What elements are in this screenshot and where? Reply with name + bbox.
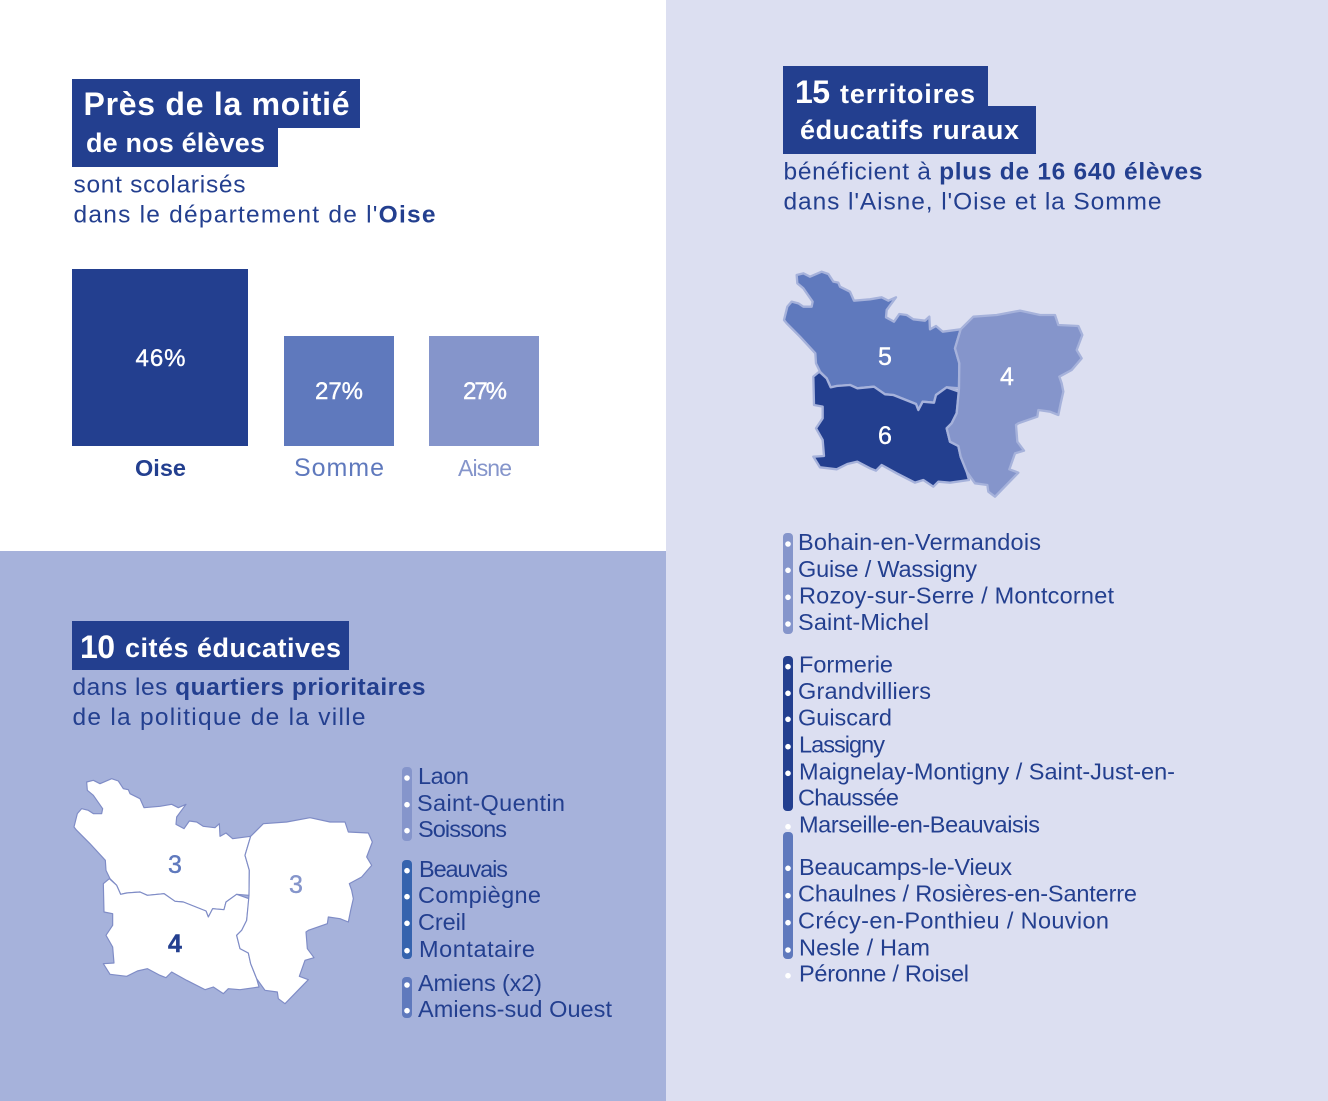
list: Aisne territories (783, 529, 1114, 635)
list: Aisne cities: Saint-Quentin (417, 790, 565, 816)
list: Aisne cities: Laon (418, 763, 469, 789)
text: quartiers prioritaires: de la politique de la ville (72, 704, 366, 731)
map: cités par département: 4 (168, 930, 182, 958)
text: bénéficient à plus de 16 640 élèves: bénéficient à plus de 16 640 élèves (784, 158, 1202, 186)
list: Aisne territories: Rozoy-sur-Serre / Montcornet (799, 582, 1114, 608)
list: Oise cities: Montataire (419, 936, 535, 962)
map: territoires par département (784, 272, 1082, 497)
list: Oise territories: Guiscard (798, 704, 892, 730)
map: territoires par département: 5 (878, 343, 892, 371)
map: territoires par département: 6 (878, 422, 892, 450)
list: Oise territories: Chaussée (798, 784, 899, 810)
list: Oise territories: Grandvilliers (798, 678, 931, 704)
panel: territoires éducatifs ruraux (666, 0, 1328, 1101)
list: Oise territories: Formerie (799, 652, 893, 678)
bar chart: Somme (294, 454, 384, 482)
bar chart (72, 269, 539, 482)
bar chart: Oise (135, 455, 186, 481)
heading: 10 cités éducatives: cités éducatives (125, 633, 341, 663)
map: cités par département: 3 (289, 871, 303, 899)
list: Aisne cities: Soissons (418, 816, 507, 842)
map: cités par département: 3 (168, 851, 182, 879)
text: bénéficient à plus de 16 640 élèves: dans l'Aisne, l'Oise et la Somme (784, 188, 1162, 216)
bar chart: 46% (136, 345, 186, 372)
heading: près de la moitié: de nos élèves (86, 128, 265, 158)
list: Somme territories: Nesle / Ham (799, 934, 930, 960)
list: Oise territories: Marseille-en-Beauvaisis (799, 812, 1040, 838)
list: Oise cities: Compiègne (418, 882, 541, 908)
text: quartiers prioritaires: dans les quartiers prioritaires (72, 674, 426, 701)
list: Oise territories (783, 652, 1175, 838)
bar chart: 27% (315, 378, 363, 405)
text: sont scolarisés: dans le département de l'Oise (74, 202, 436, 228)
text: bénéficient à plus de 16 640 élèves (784, 158, 1202, 216)
heading: 15 territoires éducatifs ruraux (783, 66, 1036, 154)
list: Oise cities (402, 856, 541, 962)
list: Oise territories: Maignelay-Montigny / Saint-Just-en- (799, 758, 1175, 784)
heading: près de la moitié (72, 79, 360, 167)
list: Somme cities: Amiens (x2) (418, 970, 542, 996)
bar chart: Aisne (458, 455, 512, 481)
list: Somme territories: Chaulnes / Rosières-en-Santerre (798, 880, 1137, 906)
list: Somme territories: Péronne / Roisel (799, 960, 969, 986)
list: Somme cities: Amiens-sud Ouest (418, 996, 612, 1022)
heading: 15 territoires éducatifs ruraux: éducatifs ruraux (800, 115, 1019, 145)
list: Somme territories (783, 832, 1137, 986)
panel: Oise share (0, 0, 666, 551)
list: Aisne cities (402, 763, 565, 842)
heading: près de la moitié: Près de la moitié (84, 86, 350, 122)
list: Oise territories: Lassigny (799, 732, 885, 758)
heading: 10 cités éducatives: 10 (80, 629, 115, 665)
list: Somme cities (402, 970, 612, 1022)
list: Oise cities: Beauvais (419, 856, 508, 882)
heading: 15 territoires éducatifs ruraux: territoires (840, 79, 975, 109)
list: Aisne territories: Saint-Michel (798, 609, 929, 635)
heading: 10 cités éducatives (72, 621, 349, 670)
bar chart: 27% (463, 378, 507, 405)
list: Somme territories: Beaucamps-le-Vieux (799, 854, 1012, 880)
list: Aisne territories: Guise / Wassigny (798, 556, 977, 582)
text: sont scolarisés (74, 172, 436, 228)
panel: cités éducatives (0, 551, 666, 1101)
text: sont scolarisés: sont scolarisés (74, 172, 246, 198)
map: territoires par département: 4 (1000, 363, 1014, 391)
list: Oise cities: Creil (418, 909, 466, 935)
text: quartiers prioritaires (72, 674, 426, 731)
list: Aisne territories: Bohain-en-Vermandois (798, 529, 1041, 555)
heading: 15 territoires éducatifs ruraux: 15 (795, 74, 830, 110)
list: Somme territories: Crécy-en-Ponthieu / Nouvion (798, 908, 1109, 934)
map: cités par département (74, 779, 372, 1004)
